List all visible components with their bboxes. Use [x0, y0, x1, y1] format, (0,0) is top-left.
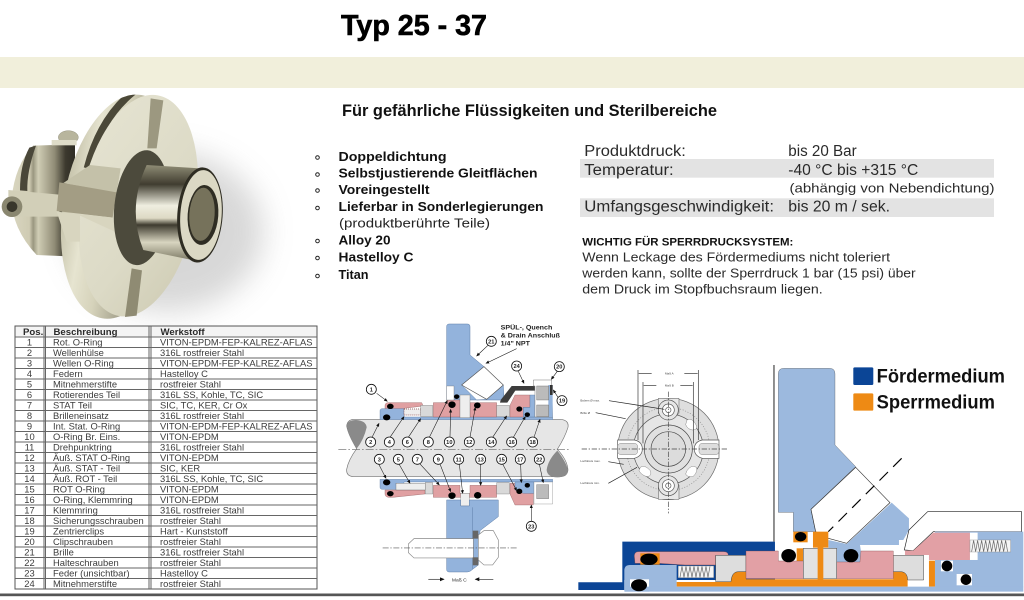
description column: Wellen O-Ring — [53, 358, 114, 368]
port label — [501, 323, 560, 348]
specifications table: -40 °C bis +315 °C — [788, 162, 918, 179]
flush port — [811, 467, 890, 543]
position column: 20 — [24, 536, 35, 547]
material column: VITON-EPDM — [160, 484, 219, 494]
bullet text: Lieferbar in Sonderlegierungen — [338, 199, 544, 214]
numbered callouts: 6 — [406, 440, 409, 446]
drawing labels: Lochkreis max. — [580, 459, 601, 463]
dimension label: Maß C — [452, 577, 467, 583]
material column: VITON-EPDM — [160, 431, 219, 442]
bottom rule — [0, 594, 1024, 596]
material column: VITON-EPDM-FEP-KALREZ-AFLAS — [160, 336, 312, 348]
material column: 316L rostfreier Stahl — [160, 410, 244, 421]
position column: 5 — [27, 378, 32, 390]
numbered callouts: 13 — [478, 457, 484, 463]
position column: 24 — [24, 578, 35, 589]
grey faces — [716, 555, 746, 582]
bullet text: Voreingestellt — [338, 182, 430, 197]
drawing labels: Maß B — [665, 384, 674, 388]
description column: Sicherungsschrauben — [53, 515, 144, 526]
numbered callouts: 20 — [556, 365, 562, 371]
specifications table: Produktdruck: — [584, 143, 686, 160]
material column: VITON-EPDM-FEP-KALREZ-AFLAS — [160, 420, 312, 432]
numbered callouts: 15 — [499, 457, 505, 463]
orange barrier channels — [677, 572, 908, 587]
numbered callouts — [366, 336, 567, 531]
material column: rostfreier Stahl — [160, 378, 221, 390]
right blue body — [935, 532, 1023, 587]
numbered callouts: 16 — [509, 440, 515, 446]
description column — [53, 336, 144, 589]
bullet markers — [316, 156, 319, 278]
numbered callouts: 9 — [437, 457, 440, 463]
description column: O-Ring Br. Eins. — [53, 431, 120, 442]
material column: SIC, KER — [160, 462, 200, 474]
position column: 13 — [24, 462, 35, 474]
description column: Drehpunktring — [53, 442, 112, 452]
position column — [24, 336, 35, 589]
description column: Zentrierclips — [53, 526, 104, 536]
material column: rostfreier Stahl — [160, 515, 221, 526]
beige header band — [0, 57, 1024, 88]
subtitle: Für gefährliche Flüssigkeiten und Sterilbereiche — [342, 102, 717, 120]
gland — [778, 368, 856, 532]
blue strip — [625, 587, 1023, 592]
material column: 316L rostfreier Stahl — [160, 442, 244, 452]
description column: Äuß. STAT O-Ring — [53, 452, 130, 463]
right spring — [970, 540, 1011, 552]
left blue sleeve — [624, 565, 677, 592]
gland — [447, 324, 484, 400]
description column: Clipschrauben — [53, 536, 113, 547]
numbered callouts: 14 — [488, 440, 495, 446]
dimension label — [428, 577, 493, 583]
bullet text: Alloy 20 — [338, 232, 390, 248]
description column: STAT Teil — [53, 400, 92, 410]
description column: Brilleneinsatz — [53, 410, 109, 421]
description column: Feder (unsichtbar) — [53, 568, 130, 578]
legend — [853, 367, 1005, 413]
position column: 11 — [25, 442, 34, 452]
numbered callouts: 22 — [536, 457, 542, 463]
material column: Hart - Kunststoff — [160, 526, 228, 536]
description column: O-Ring, Klemmring — [53, 494, 133, 505]
description column: Äuß. ROT - Teil — [53, 473, 117, 484]
left spring — [678, 566, 714, 578]
position column: 9 — [27, 420, 32, 432]
bullet text: Titan — [338, 267, 369, 282]
feature bullet list — [316, 149, 544, 282]
position column: 10 — [24, 431, 35, 442]
numbered callouts: 21 — [488, 339, 494, 345]
description column: Mitnehmerstifte — [53, 578, 117, 589]
description column: Federn — [53, 368, 83, 379]
lower seal parts — [380, 479, 553, 489]
o-rings — [631, 532, 972, 591]
legend: Fördermedium — [877, 367, 1005, 388]
numbered callouts: 5 — [397, 457, 400, 463]
material column: rostfreier Stahl — [160, 578, 221, 589]
bullet text: Doppeldichtung — [338, 149, 447, 164]
material column: 316L SS, Kohle, TC, SIC — [160, 473, 263, 484]
position column: 7 — [27, 400, 32, 410]
barrier side dark blue — [578, 542, 775, 590]
position column: 6 — [27, 389, 32, 400]
description column: ROT O-Ring — [53, 484, 105, 494]
table header: Pos. — [23, 327, 43, 338]
right pink ring — [905, 533, 970, 560]
material column: Hastelloy C — [160, 368, 208, 379]
port label: & Drain Anschluß — [501, 333, 560, 340]
specifications table — [580, 143, 994, 217]
specifications table: bis 20 Bar — [788, 143, 857, 160]
central pink rings — [746, 551, 803, 579]
position column: 23 — [24, 568, 35, 578]
description column: Klemmring — [53, 504, 98, 516]
position column: 18 — [24, 515, 35, 526]
material column: rostfreier Stahl — [160, 536, 221, 547]
lower gland and bolt — [447, 500, 498, 572]
numbered callouts: 18 — [529, 440, 536, 446]
material column: rostfreier Stahl — [160, 557, 221, 568]
material column: 316L rostfreier Stahl — [160, 546, 244, 558]
numbered callouts: 23 — [528, 524, 534, 530]
parts table — [15, 326, 317, 589]
numbered callouts: 1 — [370, 387, 373, 393]
important note: barrier pressure: WICHTIG FÜR SPERRDRUCKSYSTEM: — [582, 236, 793, 249]
table header: Beschreibung — [54, 327, 118, 338]
position column: 16 — [24, 494, 35, 505]
numbered callouts: 8 — [427, 440, 430, 446]
material column: 316L rostfreier Stahl — [160, 504, 244, 516]
table header — [23, 327, 205, 338]
drawing labels: Brille Ø — [580, 411, 591, 415]
bullet text — [338, 149, 544, 282]
position column: 8 — [27, 410, 32, 421]
front view drawing — [580, 370, 728, 513]
description column: Mitnehmerstifte — [53, 378, 117, 390]
material column: 316L SS, Kohle, TC, SIC — [160, 389, 263, 400]
drawing labels — [580, 371, 674, 485]
position column: 2 — [27, 347, 32, 358]
position column: 21 — [24, 546, 35, 558]
important note: barrier pressure — [581, 236, 916, 296]
upper white arm — [904, 512, 1022, 551]
position column: 3 — [27, 358, 32, 368]
specifications table: bis 20 m / sek. — [788, 199, 890, 216]
numbered callouts: 10 — [446, 440, 452, 446]
legend: Sperrmedium — [877, 392, 995, 413]
important note: barrier pressure: dem Druck im Stopfbuchsraum liegen. — [582, 282, 823, 296]
gland lower part — [828, 503, 909, 562]
upper seal parts — [385, 403, 423, 409]
material column: VITON-EPDM — [160, 452, 219, 463]
drawing labels: Bolzen Ø max. — [580, 398, 600, 402]
title: Typ 25 - 37 — [341, 10, 487, 42]
numbered callouts: 12 — [466, 440, 472, 446]
leader arrows — [372, 345, 558, 521]
white cavity — [775, 512, 835, 552]
position column: 1 — [27, 336, 32, 348]
left pink ring — [634, 552, 728, 565]
specifications table: Umfangsgeschwindigkeit: — [584, 199, 774, 216]
description column: Rotierendes Teil — [53, 389, 120, 400]
material column: VITON-EPDM — [160, 494, 219, 505]
important note: barrier pressure: werden kann, sollte der Sperrdruck 1 bar (15 psi) über — [581, 267, 916, 281]
description column: Int. Stat. O-Ring — [53, 420, 120, 432]
numbered callouts: 2 — [369, 440, 372, 446]
numbered callouts: 19 — [559, 399, 565, 405]
wall line — [772, 365, 775, 542]
drawing labels: Lochkreis min. — [580, 481, 600, 485]
important note: barrier pressure: Wenn Leckage des Fördermediums nicht toleriert — [582, 251, 891, 265]
material column: Hastelloy C — [160, 568, 208, 578]
position column: 4 — [27, 368, 32, 379]
bullet text: (produktberührte Teile) — [339, 216, 490, 230]
position column: 19 — [24, 526, 35, 536]
description column: Halteschrauben — [53, 557, 119, 568]
description column: Wellenhülse — [53, 347, 104, 358]
product photo: mechanical seal — [2, 85, 263, 328]
sectional drawing with numbered parts — [338, 323, 570, 583]
material column: SIC, TC, KER, Cr Ox — [160, 400, 248, 410]
specifications table: Temperatur: — [584, 162, 674, 179]
position column: 17 — [24, 504, 35, 516]
numbered callouts: 17 — [517, 457, 523, 463]
numbered callouts: 24 — [513, 364, 521, 370]
material column: VITON-EPDM-FEP-KALREZ-AFLAS — [160, 358, 312, 368]
numbered callouts: 11 — [456, 457, 462, 463]
position column: 14 — [24, 473, 35, 484]
shaft — [347, 419, 568, 477]
position column: 15 — [24, 484, 35, 494]
port label: 1/4" NPT — [501, 341, 530, 348]
position column: 22 — [24, 557, 35, 568]
table header: Werkstoff — [160, 327, 205, 338]
specifications table: (abhängig von Nebendichtung) — [790, 181, 994, 196]
position column: 12 — [24, 452, 35, 463]
drawing labels: Maß A — [665, 371, 674, 375]
description column: Brille — [53, 546, 74, 558]
bullet text: Selbstjustierende Gleitflächen — [338, 166, 538, 180]
description column: Rot. O-Ring — [53, 336, 102, 348]
numbered callouts: 7 — [416, 457, 419, 463]
numbered callouts: 3 — [378, 457, 381, 463]
material column — [160, 336, 312, 589]
numbered callouts: 4 — [388, 440, 392, 446]
port centreline — [828, 458, 902, 532]
material column: 316L rostfreier Stahl — [160, 347, 244, 358]
bullet text: Hastelloy C — [338, 250, 414, 264]
description column: Äuß. STAT - Teil — [53, 462, 120, 474]
enlarged flow section drawing — [578, 365, 1023, 592]
port label: SPÜL-, Quench — [501, 323, 552, 332]
